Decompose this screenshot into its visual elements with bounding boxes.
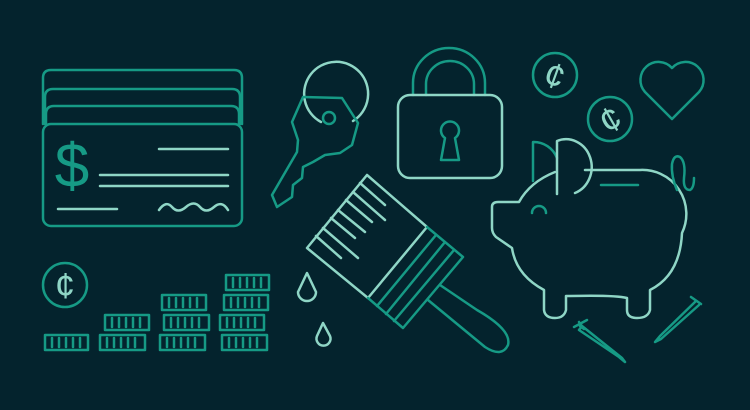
icon: cent coins right: ¢	[538, 53, 571, 98]
icon: cheque stack	[43, 70, 242, 226]
icon: nails	[574, 297, 701, 362]
icon: piggy bank	[492, 139, 694, 318]
icon: key	[272, 62, 368, 207]
icon: paint drops	[298, 273, 316, 301]
icon: heart	[640, 62, 704, 119]
text: dollar sign: $	[55, 132, 89, 201]
icon: coin stacks	[45, 275, 269, 350]
icon: paint brush	[298, 175, 508, 352]
icon: cent coins right	[533, 53, 632, 142]
icon: padlock	[398, 48, 502, 178]
icon: cent coin left: ¢	[55, 265, 75, 306]
icon: cent coin left	[43, 263, 87, 307]
icon: cent coins right: ¢	[591, 97, 629, 142]
